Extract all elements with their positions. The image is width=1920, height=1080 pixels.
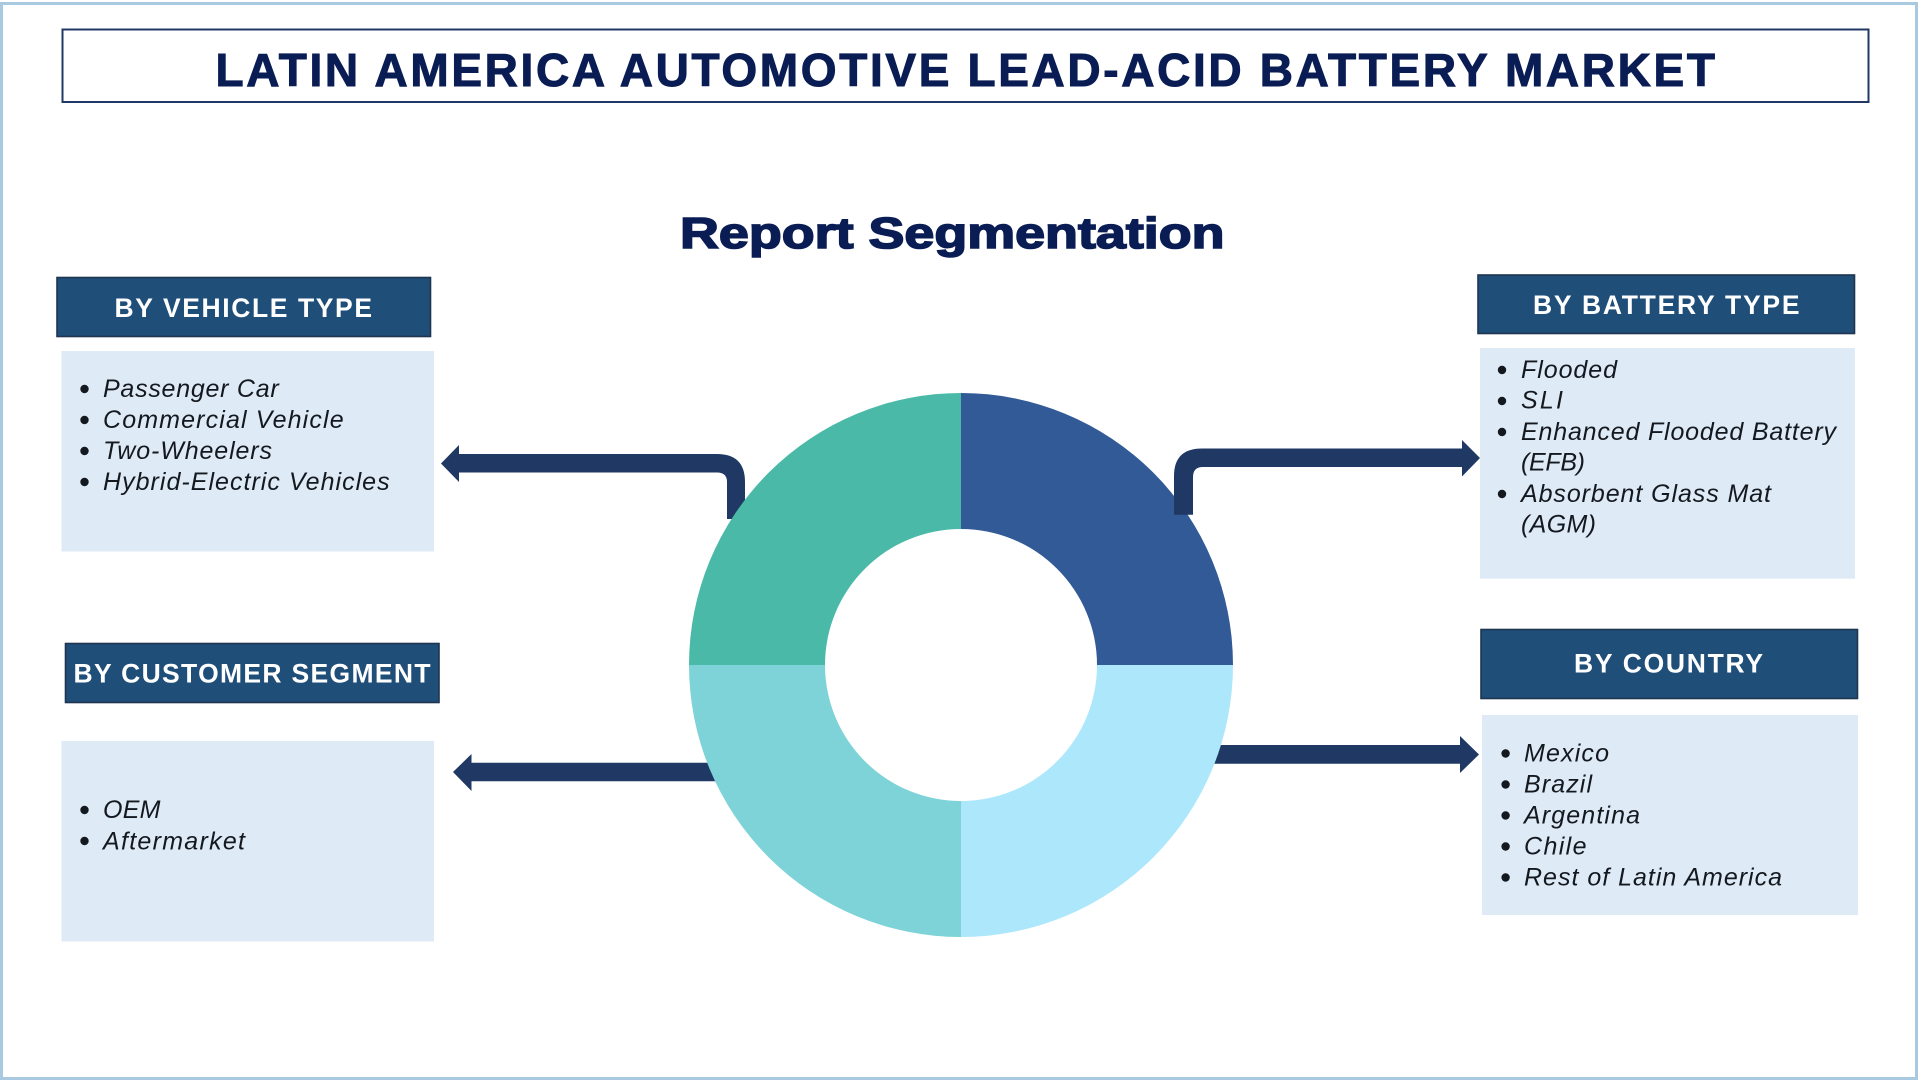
list: vehicle types [62, 351, 434, 552]
list: countries: Argentina [1522, 802, 1640, 830]
list: customer segments: OEM [103, 796, 161, 824]
arrow: donut to battery type [1174, 440, 1480, 515]
arrow: donut to vehicle type [441, 445, 745, 519]
segment: bottom left [689, 665, 961, 937]
heading: by battery type [1478, 275, 1854, 334]
heading: by vehicle type [57, 278, 430, 336]
list: countries [1482, 715, 1858, 915]
segment: top left [689, 393, 961, 665]
heading: by battery type: BY BATTERY TYPE [1533, 290, 1800, 320]
list: battery types [1480, 348, 1855, 579]
heading: by country [1481, 630, 1858, 698]
list: battery types: Enhanced Flooded Battery [1521, 418, 1838, 446]
list: vehicle types: Two-Wheelers [103, 437, 272, 465]
list: customer segments: Aftermarket [101, 828, 246, 856]
list: countries: Rest of Latin America [1524, 864, 1782, 892]
list: vehicle types: Hybrid-Electric Vehicles [103, 468, 390, 496]
list: vehicle types: Commercial Vehicle [103, 406, 344, 434]
panel: by battery type [1478, 275, 1855, 579]
list: battery types: (AGM) [1521, 511, 1596, 539]
list: battery types: Flooded [1521, 356, 1618, 384]
heading: by customer segment [66, 644, 439, 702]
panel: by customer segment [62, 644, 439, 942]
arrow: donut to country [1180, 736, 1479, 773]
title [62, 30, 1868, 102]
panel: by vehicle type [57, 278, 434, 552]
heading: by vehicle type: BY VEHICLE TYPE [114, 293, 372, 323]
title: LATIN AMERICA AUTOMOTIVE LEAD-ACID BATTERY MARKET [216, 44, 1715, 96]
heading: by customer segment: BY CUSTOMER SEGMENT [74, 659, 430, 689]
list: battery types: (EFB) [1521, 449, 1585, 477]
heading: by country: BY COUNTRY [1574, 649, 1763, 679]
list: battery types: SLI [1521, 387, 1563, 415]
segment: bottom right [961, 665, 1233, 937]
chart: segmentation donut [689, 393, 1233, 937]
list: battery types: Absorbent Glass Mat [1519, 480, 1772, 508]
panel: by country [1481, 630, 1858, 915]
heading: report segmentation: Report Segmentation [680, 209, 1224, 258]
list: countries: Brazil [1524, 771, 1593, 799]
arrow: donut to customer segment [453, 754, 740, 791]
list: countries: Mexico [1524, 740, 1609, 768]
list: countries: Chile [1524, 833, 1586, 861]
list: vehicle types: Passenger Car [103, 375, 280, 403]
list: customer segments [62, 741, 434, 942]
segment: top right [961, 393, 1233, 665]
